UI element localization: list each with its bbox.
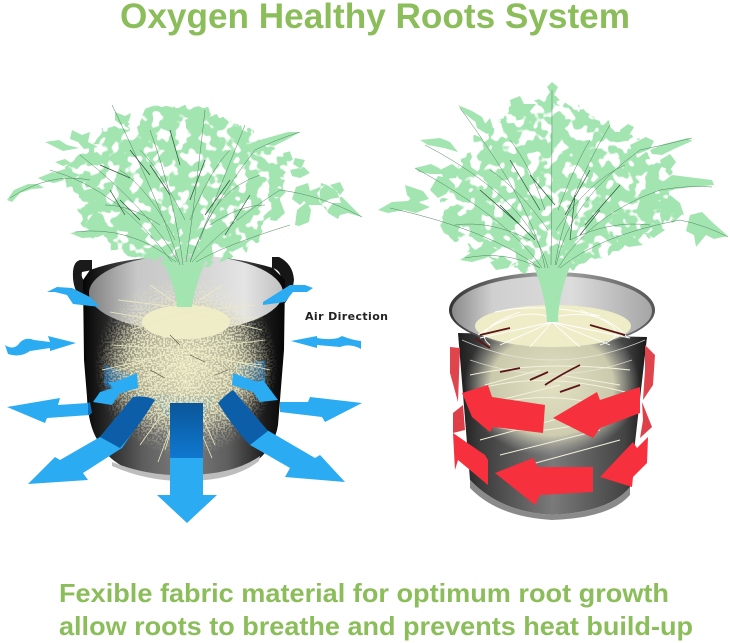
- arrow: mid right wave: [291, 336, 361, 349]
- outer leaves and stem: [7, 107, 362, 307]
- pot body: [458, 333, 647, 515]
- foliage mass: [65, 108, 290, 265]
- caption line 1: Fexible fabric material for optimum root growth: [59, 578, 669, 608]
- arrow: lower right: [218, 390, 345, 482]
- pot inner opening: [89, 255, 283, 331]
- arrow: inner right: [232, 373, 278, 402]
- root ball: [94, 273, 278, 462]
- pot rim and inner wall: [449, 272, 655, 348]
- plant: left: [7, 105, 362, 307]
- arrow: right middle: [640, 402, 652, 438]
- blue glow behind roots: [104, 360, 266, 420]
- arrow: top left: [450, 347, 460, 402]
- illustration: plastic pot with circling roots: [378, 82, 728, 520]
- caption: [59, 578, 693, 641]
- arrow: upper right: [263, 285, 313, 305]
- arrow: mid left wave: [5, 336, 76, 355]
- foliage mass: [440, 98, 680, 270]
- illustration: fabric pot with air flow: [5, 105, 362, 523]
- blue air arrows: [5, 285, 362, 523]
- red arrows: [450, 345, 655, 505]
- arrow: left middle: [453, 405, 465, 433]
- arrow: left: [7, 398, 90, 423]
- coiled roots: [462, 305, 645, 470]
- plant: right: [378, 82, 728, 322]
- arrow: right: [280, 397, 362, 422]
- pot base: [470, 480, 630, 520]
- arrow: down: [157, 403, 217, 523]
- arrow: left lower: [453, 433, 488, 485]
- arrow: upper left: [47, 287, 100, 307]
- arrow: inner left: [93, 373, 138, 405]
- arrow: front upper left: [462, 385, 545, 433]
- pot base rim: [112, 456, 260, 481]
- label: air direction: Air Direction: [305, 310, 388, 323]
- arrow: lower left: [28, 397, 155, 484]
- arrow: front upper right: [553, 387, 640, 438]
- pot handles: [73, 257, 294, 303]
- branches: [390, 90, 728, 268]
- arrow shafts inside pot: [88, 390, 268, 458]
- caption line 2: allow roots to breathe and prevents heat build-up: [59, 611, 693, 641]
- branches: [10, 105, 362, 265]
- outer leaves and stem: [378, 82, 728, 322]
- arrow: top right: [643, 345, 655, 400]
- pot body: [83, 256, 285, 478]
- arrow: front lower: [495, 458, 593, 505]
- arrow: right lower: [600, 437, 648, 487]
